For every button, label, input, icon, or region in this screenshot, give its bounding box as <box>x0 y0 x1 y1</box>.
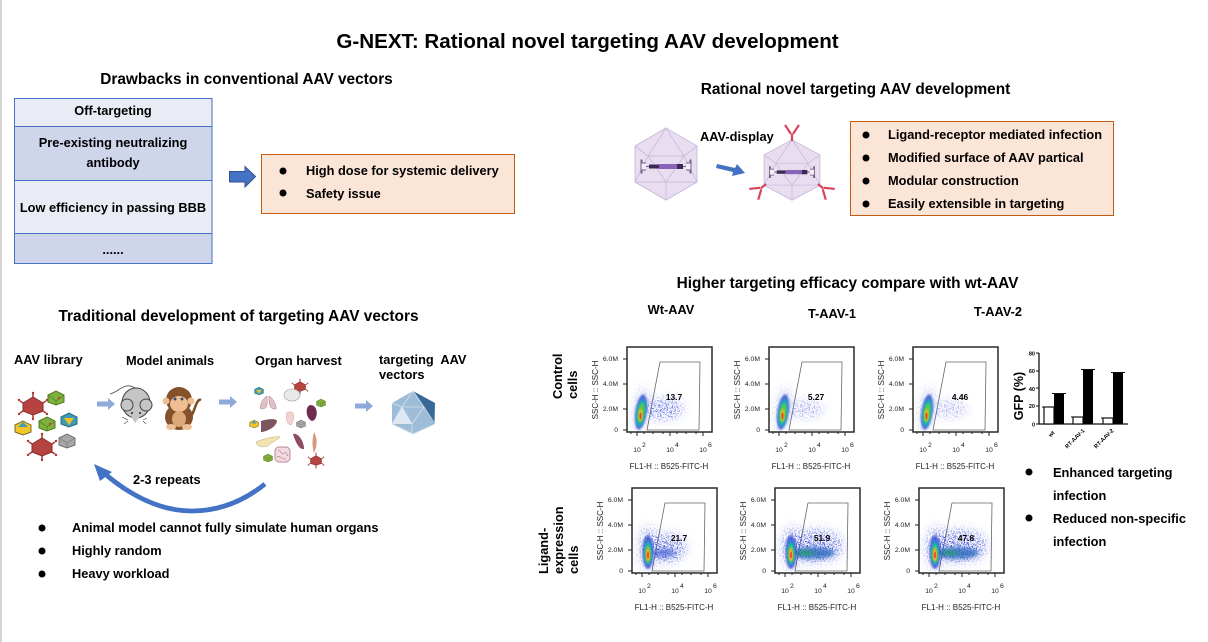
column labels: Wt-AAV <box>648 302 695 317</box>
flow plot: control Wt-AAV: 13.7 <box>666 392 682 402</box>
panel: drawbacks table: Pre-existing neutralizing <box>39 135 187 150</box>
flow plot: ligand T-AAV-2: 6 <box>1000 583 1004 590</box>
label: AAV-display: AAV-display <box>700 129 775 144</box>
flow plot: ligand Wt-AAV: FL1-H :: B525-FITC-H <box>635 603 714 612</box>
column labels <box>648 302 1022 321</box>
flow plot: control T-AAV-1: 10 <box>775 447 783 454</box>
icon: monkey <box>162 387 201 430</box>
panel: targeting conclusions: Reduced non-specific <box>1053 511 1186 526</box>
flow plot: control Wt-AAV: 10 <box>666 447 674 454</box>
flow plot: control T-AAV-1: FL1-H :: B525-FITC-H <box>772 462 851 471</box>
flow plot: control T-AAV-2: 10 <box>919 447 927 454</box>
panel: AAV display features <box>850 122 1114 216</box>
label: repeats: 2-3 repeats <box>133 472 201 487</box>
flow plot: control T-AAV-2: 0 <box>900 427 904 434</box>
arrow: animals to organs <box>219 396 237 408</box>
flow plot: ligand T-AAV-1: FL1-H :: B525-FITC-H <box>778 603 857 612</box>
flow plot: control Wt-AAV: 6 <box>708 442 712 449</box>
step labels: vectors <box>379 367 425 382</box>
flow plot: control T-AAV-1: 2.0M <box>745 406 760 413</box>
bar chart: GFP percent: 40 <box>1029 387 1035 393</box>
panel: traditional drawbacks list: Heavy workload <box>72 566 169 581</box>
flow plot: control Wt-AAV: 4 <box>675 442 679 449</box>
arrow: drawbacks to consequences <box>230 166 256 187</box>
flow plot: control T-AAV-1: 10 <box>808 447 816 454</box>
panel: AAV display features: Modular construction <box>888 173 1019 188</box>
flow plot: control T-AAV-1: SSC-H :: SSC-H <box>733 360 742 419</box>
row label: ligand-expression cells: expression <box>551 506 566 574</box>
flow plot: control T-AAV-1 <box>733 347 854 471</box>
title: G-NEXT: Rational novel targeting AAV development <box>336 30 839 53</box>
flow plot: control T-AAV-2: 4.46 <box>952 392 968 402</box>
step labels: Model animals <box>126 353 214 368</box>
flow plot: control Wt-AAV: 0 <box>614 427 618 434</box>
flow plot: ligand Wt-AAV: 2 <box>647 583 651 590</box>
bar chart: GFP percent: 0 <box>1032 422 1035 428</box>
heading: higher efficacy: Higher targeting efficacy compare with wt-AAV <box>677 275 1019 292</box>
step labels <box>14 352 467 382</box>
flow plot: ligand T-AAV-1: 2.0M <box>751 547 766 554</box>
flow plot: ligand Wt-AAV: 0 <box>619 568 623 575</box>
page edge line <box>0 0 2 642</box>
flow plot: control Wt-AAV: 4.0M <box>603 381 618 388</box>
flow plot: ligand T-AAV-2: SSC-H :: SSC-H <box>883 501 892 560</box>
bar chart: GFP percent: RT-AAV-1 <box>1064 428 1086 450</box>
arrow: 2-3 repeats loop <box>94 464 265 511</box>
flow plot: ligand T-AAV-1: 10 <box>781 588 789 595</box>
flow plot: control Wt-AAV: 10 <box>699 447 707 454</box>
flow plot: ligand T-AAV-1: 2 <box>790 583 794 590</box>
flow plot: control Wt-AAV: SSC-H :: SSC-H <box>591 360 600 419</box>
column labels: T-AAV-1 <box>808 306 856 321</box>
arrow: organs to vectors <box>355 400 373 412</box>
flow plot: control T-AAV-2: 10 <box>952 447 960 454</box>
panel: traditional drawbacks list <box>38 520 378 581</box>
flow plot: ligand Wt-AAV: 10 <box>671 588 679 595</box>
flow plot: control T-AAV-1: 4.0M <box>745 381 760 388</box>
flow plot: control T-AAV-1: 6.0M <box>745 356 760 363</box>
flow plot: ligand T-AAV-2: 10 <box>958 588 966 595</box>
flow plot: ligand Wt-AAV: 10 <box>704 588 712 595</box>
arrow: library to animals <box>97 398 115 410</box>
flow plot: control Wt-AAV: 2 <box>642 442 646 449</box>
flow plot: ligand T-AAV-2: FL1-H :: B525-FITC-H <box>922 603 1001 612</box>
panel: drawbacks table: Off-targeting <box>74 103 152 118</box>
flow plot: control Wt-AAV: 10 <box>633 447 641 454</box>
bar chart: GFP percent <box>1012 352 1128 450</box>
flow plot: ligand T-AAV-2: 4.0M <box>895 522 910 529</box>
row label: control cells: cells <box>565 371 580 399</box>
flow plot: control T-AAV-2: FL1-H :: B525-FITC-H <box>916 462 995 471</box>
flow plot: ligand Wt-AAV: SSC-H :: SSC-H <box>596 501 605 560</box>
panel: targeting conclusions: infection <box>1053 534 1107 549</box>
row label: ligand-expression cells <box>536 506 581 574</box>
step labels: Organ harvest <box>255 353 343 368</box>
flow plot: ligand T-AAV-2: 10 <box>991 588 999 595</box>
icon: AAV capsid <box>635 128 697 200</box>
flow plot: control T-AAV-1: 2 <box>784 442 788 449</box>
bar chart: GFP percent: GFP (%) <box>1012 372 1026 420</box>
panel: AAV display features: Modified surface of AAV partical <box>888 150 1084 165</box>
flow plot: control T-AAV-1: 4 <box>817 442 821 449</box>
flow plot: control Wt-AAV <box>591 347 712 471</box>
panel: targeting conclusions: Enhanced targeting <box>1053 465 1172 480</box>
flow plot: ligand Wt-AAV: 4.0M <box>608 522 623 529</box>
bar chart: GFP percent: 80 <box>1029 352 1035 358</box>
row label: control cells <box>550 354 580 399</box>
flow plot: ligand T-AAV-1: 51.9 <box>814 533 830 543</box>
flow plot: control T-AAV-2: SSC-H :: SSC-H <box>877 360 886 419</box>
flow plot: ligand Wt-AAV: 21.7 <box>671 533 687 543</box>
panel: consequences <box>262 154 514 214</box>
flow plot: ligand T-AAV-2: 6.0M <box>895 497 910 504</box>
panel: AAV display features: Easily extensible in targeting <box>888 196 1064 211</box>
flow plot: ligand T-AAV-1: SSC-H :: SSC-H <box>739 501 748 560</box>
bar chart: GFP percent: wt <box>1047 430 1057 440</box>
flow plot: control T-AAV-1: 10 <box>841 447 849 454</box>
row label: ligand-expression cells: Ligand- <box>536 528 551 574</box>
heading: traditional development: Traditional development of targeting AAV vectors <box>58 308 419 325</box>
flow plot: control T-AAV-2: 2.0M <box>889 406 904 413</box>
flow plot: control Wt-AAV: 6.0M <box>603 356 618 363</box>
heading: drawbacks: Drawbacks in conventional AAV vectors <box>100 71 393 88</box>
flow plot: ligand T-AAV-1: 10 <box>814 588 822 595</box>
flow plot: ligand T-AAV-2: 4 <box>967 583 971 590</box>
flow plot: ligand Wt-AAV: 4 <box>680 583 684 590</box>
icon: modified AAV capsid with antibodies <box>749 125 835 200</box>
step labels: targeting AAV <box>379 352 467 367</box>
flow plot: ligand T-AAV-1: 6.0M <box>751 497 766 504</box>
bar chart: GFP percent: 20 <box>1029 404 1035 410</box>
panel: traditional drawbacks list: Highly random <box>72 543 162 558</box>
flow plot: ligand T-AAV-2 <box>883 488 1004 612</box>
flow plot: ligand T-AAV-2: 2 <box>934 583 938 590</box>
heading: rational development: Rational novel targeting AAV development <box>701 81 1010 98</box>
flow plot: ligand T-AAV-2: 0 <box>906 568 910 575</box>
flow plot: ligand Wt-AAV: 10 <box>638 588 646 595</box>
flow plot: control T-AAV-1: 6 <box>850 442 854 449</box>
flow plot: ligand T-AAV-1: 0 <box>762 568 766 575</box>
panel: targeting conclusions <box>1026 465 1186 549</box>
flow plot: ligand T-AAV-2: 10 <box>925 588 933 595</box>
panel: drawbacks table: antibody <box>86 155 141 170</box>
arrow: AAV display <box>716 164 745 176</box>
flow plot: control T-AAV-1: 5.27 <box>808 392 824 402</box>
bar chart: GFP percent: 60 <box>1029 369 1035 375</box>
panel: drawbacks table <box>14 98 212 264</box>
flow plot: control Wt-AAV: 2.0M <box>603 406 618 413</box>
panel: traditional drawbacks list: Animal model cannot fully simulate human organs <box>72 520 378 535</box>
flow plot: ligand T-AAV-1 <box>739 488 860 612</box>
flow plot: ligand T-AAV-1: 10 <box>847 588 855 595</box>
panel: consequences: Safety issue <box>306 186 381 201</box>
icon: mouse <box>110 386 152 424</box>
flow plot: ligand T-AAV-1: 4 <box>823 583 827 590</box>
bar chart: GFP percent: RT-AAV-2 <box>1093 428 1115 450</box>
flow plot: ligand Wt-AAV <box>596 488 717 612</box>
icon: AAV library <box>15 391 77 461</box>
row label: ligand-expression cells: cells <box>566 546 581 574</box>
column labels: T-AAV-2 <box>974 304 1022 319</box>
flow plot: ligand Wt-AAV: 6 <box>713 583 717 590</box>
flow plot: control T-AAV-1: 0 <box>756 427 760 434</box>
flow plot: control T-AAV-2: 6 <box>994 442 998 449</box>
flow plot: control T-AAV-2: 10 <box>985 447 993 454</box>
flow plot: control T-AAV-2: 4.0M <box>889 381 904 388</box>
flow plot: control T-AAV-2: 4 <box>961 442 965 449</box>
panel: drawbacks table: Low efficiency in passing BBB <box>20 200 206 215</box>
flow plot: ligand T-AAV-1: 6 <box>856 583 860 590</box>
panel: drawbacks table: ...... <box>102 242 124 257</box>
flow plot: ligand T-AAV-2: 2.0M <box>895 547 910 554</box>
panel: AAV display features: Ligand-receptor mediated infection <box>888 127 1102 142</box>
icon: targeting AAV vector <box>392 391 435 434</box>
flow plot: ligand T-AAV-1: 4.0M <box>751 522 766 529</box>
row label: control cells: Control <box>550 354 565 399</box>
panel: targeting conclusions: infection <box>1053 488 1107 503</box>
flow plot: control Wt-AAV: FL1-H :: B525-FITC-H <box>630 462 709 471</box>
step labels: AAV library <box>14 352 84 367</box>
flow plot: ligand T-AAV-2: 47.8 <box>958 533 974 543</box>
flow plot: ligand Wt-AAV: 6.0M <box>608 497 623 504</box>
panel: consequences: High dose for systemic delivery <box>306 163 500 178</box>
flow plot: control T-AAV-2: 6.0M <box>889 356 904 363</box>
flow plot: ligand Wt-AAV: 2.0M <box>608 547 623 554</box>
flow plot: control T-AAV-2 <box>877 347 998 471</box>
icon: organ harvest <box>250 379 325 468</box>
flow plot: control T-AAV-2: 2 <box>928 442 932 449</box>
